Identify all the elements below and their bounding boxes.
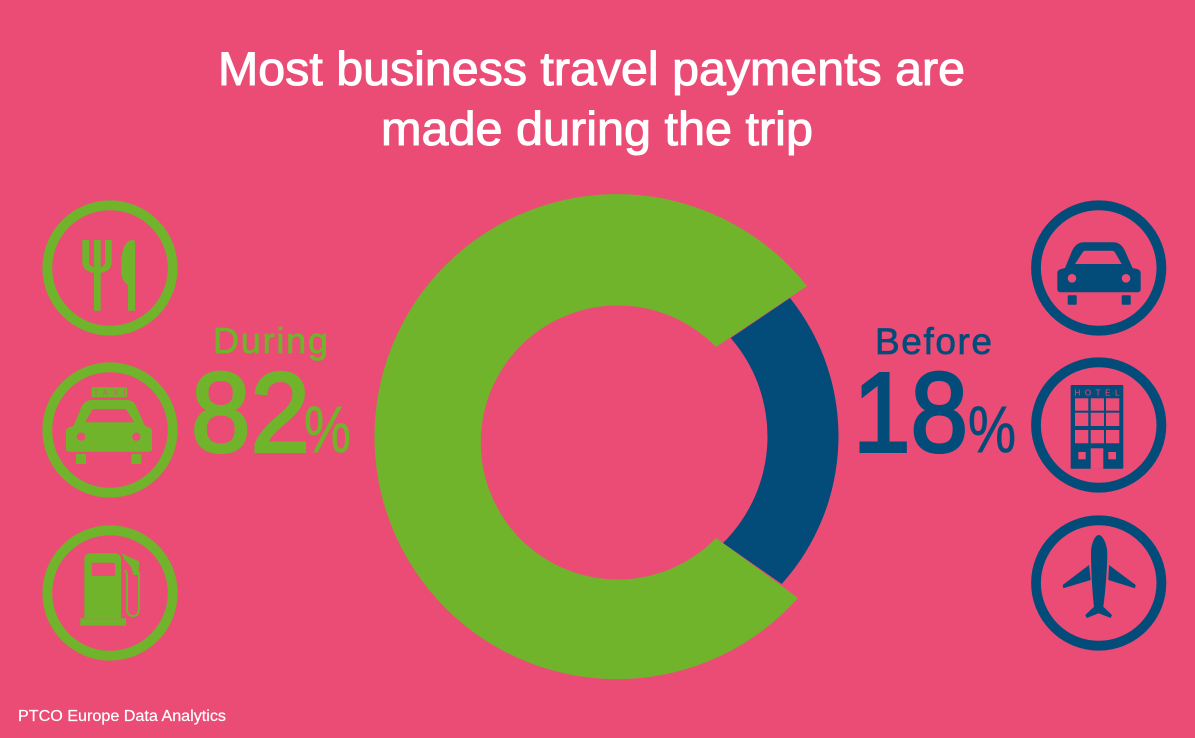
label: during 82%: % [304,392,351,466]
label: before 18%: % [968,392,1016,466]
label: before 18% [853,321,1016,476]
icon: hotel: HOTEL [1074,388,1120,398]
icon: taxi [47,367,173,493]
label: during 82%: 82 [191,350,310,476]
icon: airplane [1036,520,1161,646]
label: before 18%: Before [875,321,992,362]
icon: fork and knife [47,205,173,331]
label: during 82%: During [213,320,328,361]
title [218,42,965,155]
icon: car [1036,205,1161,331]
icon: hotel [1036,362,1161,488]
title: Most business travel payments are [218,42,965,95]
label: before 18%: 18 [853,350,968,476]
icon: taxi: TAXI [94,389,126,398]
donut chart [374,194,838,679]
donut segment: during 82% [374,194,807,679]
label: during 82% [191,320,351,476]
donut segment: before 18% [723,298,838,584]
title: made during the trip [381,102,813,155]
source note: PTCO Europe Data Analytics [18,708,226,725]
icon: fuel pump [47,530,173,656]
